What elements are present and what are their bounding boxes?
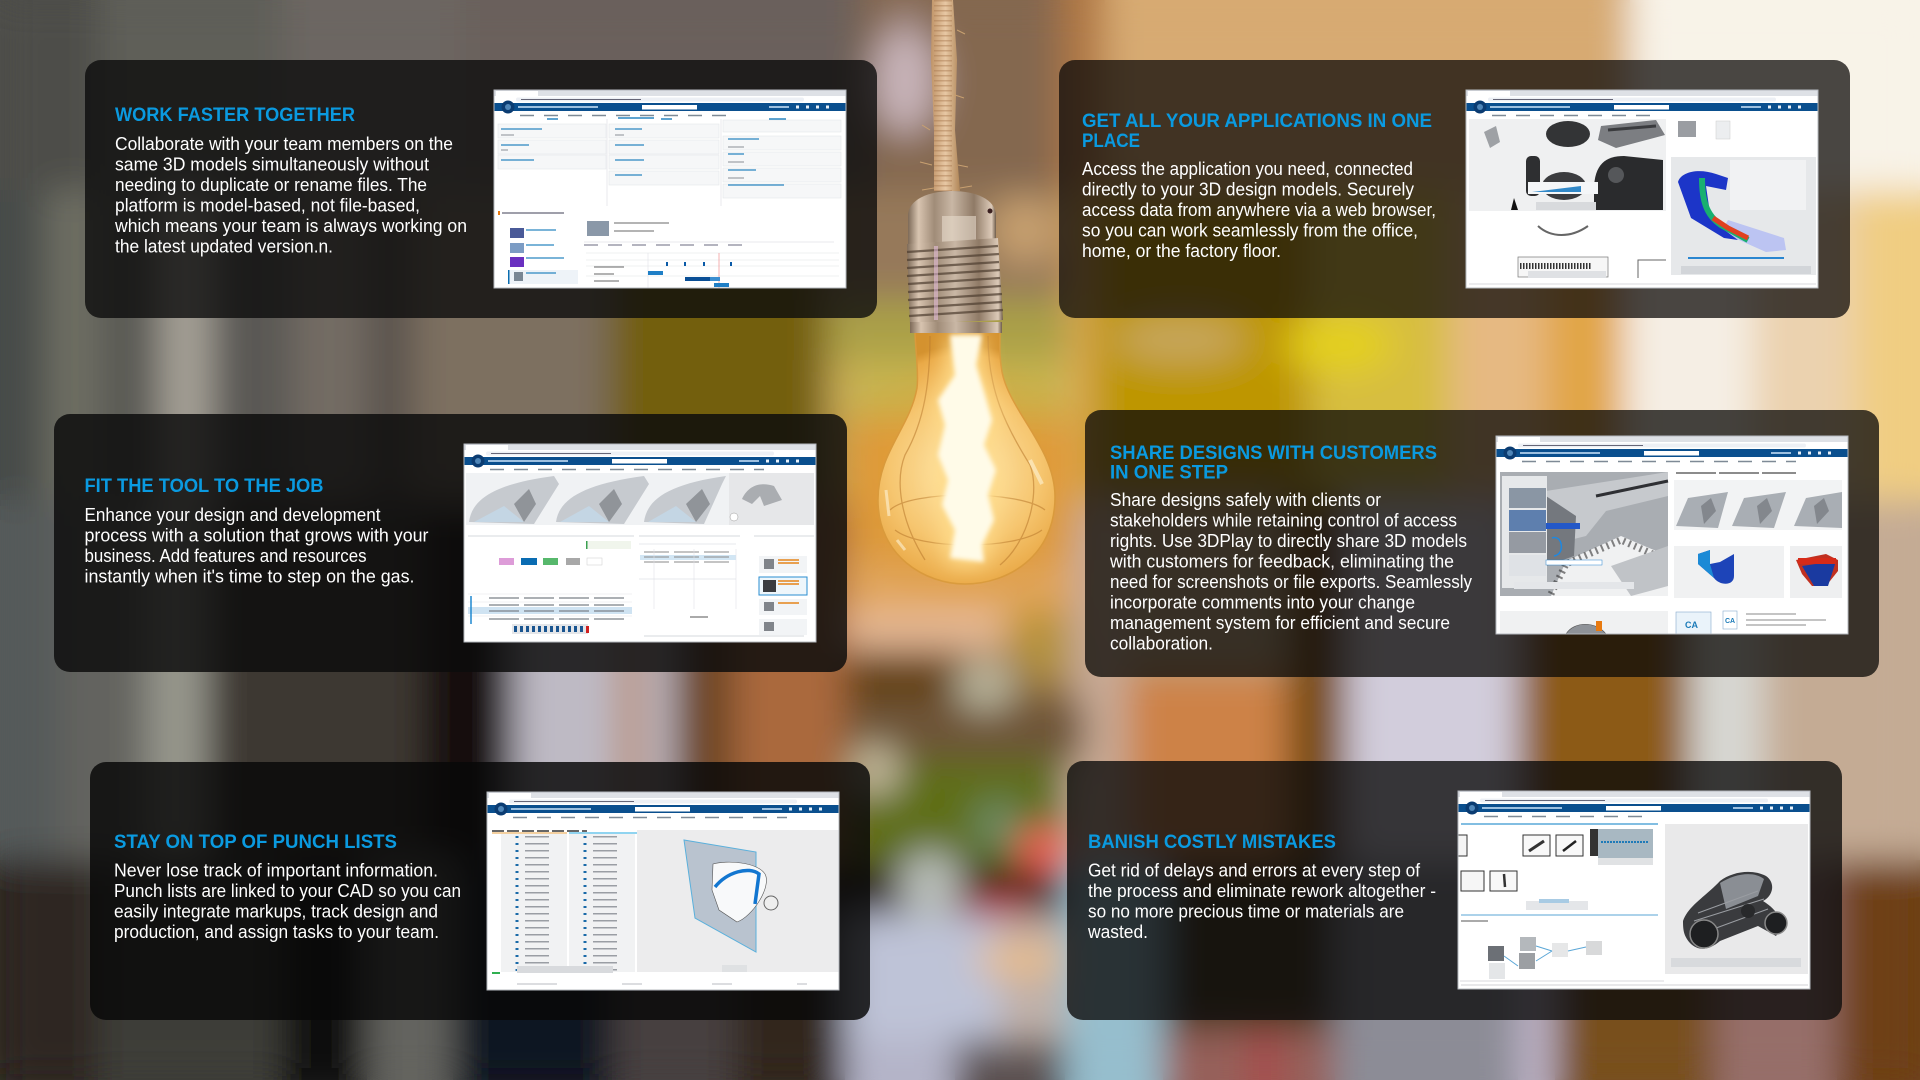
screenshot: kanban project management	[494, 90, 846, 288]
panel: fit the tool to the job	[54, 414, 847, 672]
body text: wasted.	[1087, 922, 1148, 942]
heading	[1082, 111, 1432, 152]
heading: BANISH COSTLY MISTAKES	[1088, 832, 1336, 853]
body text: so no more precious time or materials are	[1088, 902, 1404, 922]
heading: SHARE DESIGNS WITH CUSTOMERS	[1110, 443, 1437, 464]
body text: Share designs safely with clients or	[1110, 490, 1381, 510]
body text	[84, 505, 428, 586]
body text: business. Add features and resources	[84, 546, 366, 566]
body text: production, and assign tasks to your team.	[114, 922, 439, 942]
metal thread socket	[907, 191, 1003, 333]
bulb glow	[825, 350, 1105, 610]
heading: PLACE	[1082, 131, 1140, 152]
body text: so you can work seamlessly from the office,	[1082, 220, 1418, 240]
panel: get all your applications in one place	[1059, 60, 1850, 318]
glass reflections	[886, 336, 1045, 565]
body text: easily integrate markups, track design and	[114, 902, 438, 922]
heading: STAY ON TOP OF PUNCH LISTS	[114, 832, 397, 853]
body text: incorporate comments into your change	[1110, 592, 1415, 612]
heading: IN ONE STEP	[1110, 462, 1228, 484]
panel: stay on top of punch lists	[90, 762, 870, 1020]
body text: instantly when it's time to step on the gas.	[84, 566, 414, 586]
body text: directly to your 3D design models. Securely	[1082, 180, 1414, 200]
panel: work faster together	[85, 60, 877, 318]
screenshot: product structure and 3D navigator	[1458, 791, 1810, 989]
screenshot: 3D models and simulation	[1466, 90, 1818, 288]
body text: management system for efficient and secure	[1110, 613, 1450, 633]
body text: Enhance your design and development	[84, 505, 380, 525]
heading: GET ALL YOUR APPLICATIONS IN ONE	[1082, 111, 1432, 132]
panel background	[1067, 761, 1842, 1020]
screenshot: punch list tree and 3D view	[487, 792, 839, 990]
panel background	[54, 414, 847, 672]
screenshot: workflow and car parts	[464, 444, 816, 642]
body text: with customers for feedback, eliminating the	[1109, 552, 1454, 572]
body text: rights. Use 3DPlay to directly share 3D models	[1110, 531, 1467, 551]
body text	[114, 134, 467, 256]
panel background	[1085, 410, 1879, 677]
panel background	[90, 762, 870, 1020]
heading	[1110, 443, 1437, 484]
body text	[114, 860, 461, 942]
glowing filament	[935, 335, 1002, 565]
heading: FIT THE TOOL TO THE JOB	[84, 476, 324, 497]
panel: banish costly mistakes	[1067, 761, 1842, 1020]
panel: share designs with customers in one step	[1085, 410, 1879, 677]
body text: Collaborate with your team members on the	[115, 134, 453, 154]
rope cord	[920, 0, 972, 191]
screenshot: 3D review and comments	[1496, 436, 1848, 634]
body text: Get rid of delays and errors at every step of	[1088, 860, 1421, 880]
body text: Access the application you need, connected	[1082, 159, 1413, 179]
body text	[1082, 159, 1436, 261]
body text: Never lose track of important information.	[114, 860, 438, 880]
body text: the process and eliminate rework altogether -	[1088, 881, 1436, 901]
panel background	[85, 60, 877, 318]
body text: access data from anywhere via a web browser,	[1082, 200, 1436, 220]
glass bulb	[878, 332, 1055, 584]
body text	[1109, 490, 1472, 654]
panel background	[1059, 60, 1850, 318]
body text	[1087, 860, 1436, 942]
body text: Punch lists are linked to your CAD so you can	[114, 881, 461, 901]
body text: same 3D models simultaneously without	[115, 154, 429, 174]
body text: needing to duplicate or rename files. The	[115, 175, 427, 195]
body text: which means your team is always working on	[114, 216, 467, 236]
body text: home, or the factory floor.	[1082, 241, 1281, 261]
body text: process with a solution that grows with your	[84, 526, 428, 546]
heading: WORK FASTER TOGETHER	[115, 105, 355, 126]
body text: the latest updated version.n.	[115, 236, 333, 256]
body text: collaboration.	[1110, 634, 1213, 654]
screenshot: 3D review and comments: CA	[1685, 620, 1698, 630]
body text: stakeholders while retaining control of access	[1110, 510, 1457, 530]
light bulb hanging on a rope cord	[825, 0, 1105, 610]
screenshot: 3D review and comments: CA	[1725, 618, 1735, 625]
body text: need for screenshots or file exports. Seamlessly	[1110, 572, 1472, 592]
body text: platform is model-based, not file-based,	[115, 196, 420, 216]
